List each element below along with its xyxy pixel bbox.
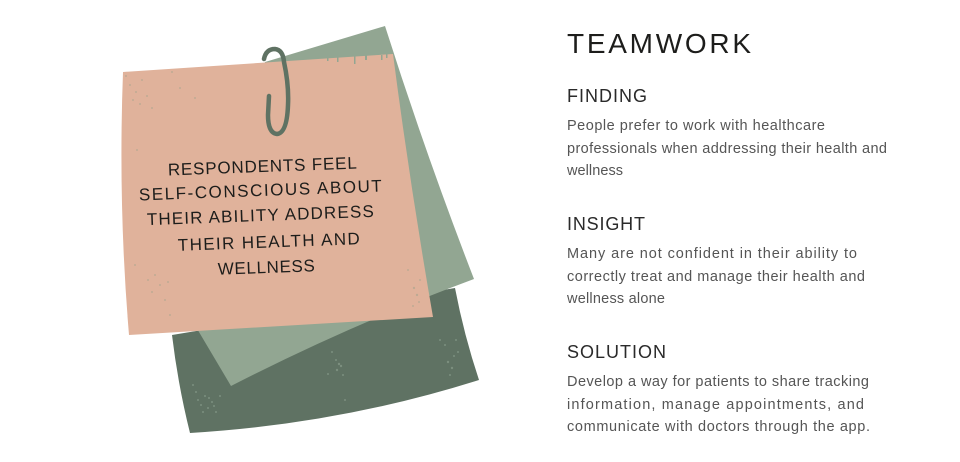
body text: finding: People prefer to work with healthcare	[567, 118, 825, 134]
body text: insight	[566, 246, 865, 307]
dark green note	[172, 288, 479, 433]
body text: solution: Develop a way for patients to share tracking	[567, 374, 869, 390]
note text: THEIR HEALTH AND	[178, 229, 360, 255]
heading: insight: INSIGHT	[567, 214, 645, 234]
sage green note	[180, 26, 474, 386]
body text: finding	[566, 118, 887, 179]
body text: insight: correctly treat and manage their health and	[567, 269, 865, 285]
section: finding	[566, 86, 887, 179]
note text: RESPONDENTS FEEL	[168, 154, 357, 179]
note text: THEIR ABILITY ADDRESS	[147, 202, 374, 229]
body text: insight: wellness alone	[566, 291, 665, 307]
section: solution	[567, 342, 870, 435]
heading: solution: SOLUTION	[567, 342, 666, 362]
body text: solution: communicate with doctors through the app.	[567, 419, 870, 435]
body text: solution	[567, 374, 870, 435]
section: insight	[566, 214, 865, 307]
note text	[139, 154, 382, 279]
note text: SELF-CONSCIOUS ABOUT	[139, 177, 382, 204]
body text: solution: information, manage appointments, and	[567, 397, 864, 413]
peach note	[121, 54, 433, 335]
body text: insight: Many are not confident in their ability to	[567, 246, 857, 262]
title: TEAMWORK	[567, 28, 751, 59]
icon: paperclip	[264, 49, 288, 134]
heading: finding: FINDING	[567, 86, 647, 106]
body text: finding: professionals when addressing their health and	[567, 141, 887, 157]
note text: WELLNESS	[217, 256, 315, 279]
illustration: stacked sticky notes	[121, 26, 479, 433]
body text: finding: wellness	[566, 163, 623, 179]
